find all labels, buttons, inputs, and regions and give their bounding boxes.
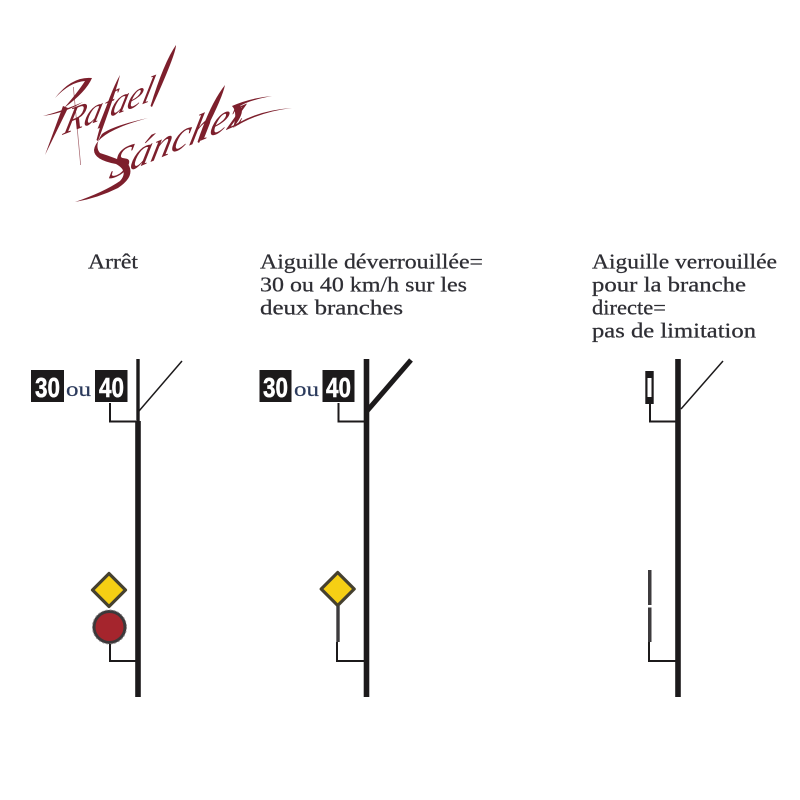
mast — [136, 359, 140, 421]
upper bracket — [338, 403, 364, 422]
icon: narrow upper sign — [645, 371, 654, 404]
icon: narrow lower plate — [648, 608, 652, 642]
lower mast — [135, 421, 141, 697]
heading: Arrêt: Arrêt — [88, 250, 138, 274]
panel: signal aiguille déverrouillée — [260, 359, 411, 697]
heading: Aiguille déverrouillée: deux branches — [260, 296, 403, 320]
lower bracket — [649, 642, 676, 661]
icon: narrow upper plate — [648, 570, 652, 605]
heading: Aiguille déverrouillée: Aiguille déverrouillée= — [260, 250, 483, 274]
label: ou: ou — [294, 377, 320, 401]
icon: yellow diamond — [321, 572, 354, 606]
upper bracket — [650, 404, 676, 422]
signal pole — [336, 606, 340, 642]
label: ou: ou — [66, 377, 92, 401]
panel: signal aiguille verrouillée — [645, 359, 723, 697]
panel: 30: 30 — [263, 372, 288, 403]
panel: 40: 40 — [99, 372, 124, 403]
icon: red disc — [92, 610, 126, 644]
heading: Aiguille verrouillée: pour la branche — [592, 272, 746, 296]
panel: signal Arrêt — [31, 359, 182, 697]
upper bracket — [110, 403, 136, 422]
logo: Rafael Sánchez signature: Rafael — [59, 68, 159, 145]
heading: Aiguille verrouillée: pas de limitation — [592, 318, 757, 342]
heading: Aiguille verrouillée: Aiguille verrouillée — [592, 250, 777, 274]
thin diagonal arm — [139, 361, 182, 411]
mast — [675, 359, 681, 697]
heading: Aiguille déverrouillée — [260, 250, 483, 320]
logo: Rafael Sánchez signature: Sánchez — [106, 85, 252, 190]
heading: Aiguille déverrouillée: 30 ou 40 km/h sur les — [260, 272, 467, 296]
lower bracket — [110, 644, 136, 661]
panel: 30: 30 — [35, 372, 60, 403]
logo: Rafael Sánchez signature — [43, 45, 292, 202]
panel: 40: 40 — [326, 372, 351, 403]
heading: Aiguille verrouillée: directe= — [592, 296, 666, 320]
thick diagonal arm — [367, 360, 411, 411]
thin diagonal arm — [681, 361, 723, 409]
lower bracket — [337, 642, 364, 661]
icon: yellow diamond — [92, 574, 126, 606]
mast — [364, 359, 369, 697]
heading: Aiguille verrouillée — [592, 250, 777, 342]
